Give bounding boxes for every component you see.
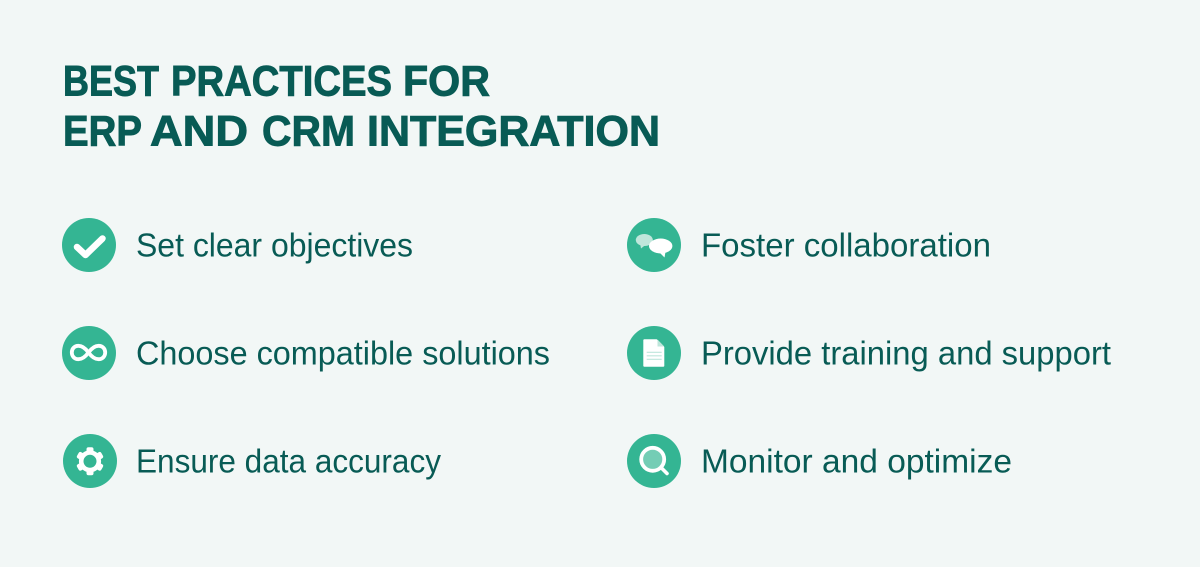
- item: provide training and support: [627, 326, 1111, 380]
- icon: gear: [63, 434, 117, 488]
- icon: check mark: [62, 218, 116, 272]
- item: choose compatible solutions: [62, 326, 550, 380]
- title: [63, 59, 660, 156]
- item: foster collaboration: [627, 218, 991, 272]
- label: choose compatible solutions: Choose compatible solutions: [136, 334, 550, 372]
- title: PRACTICES: [171, 59, 392, 106]
- label: monitor and optimize: Monitor and optimize: [701, 442, 1012, 480]
- label: ensure data accuracy: Ensure data accuracy: [136, 442, 441, 480]
- title: FOR: [403, 59, 490, 106]
- icon: infinity: [62, 326, 116, 380]
- label: foster collaboration: Foster collaboration: [701, 226, 991, 264]
- label: provide training and support: Provide training and support: [701, 334, 1111, 372]
- title: BEST: [63, 59, 159, 106]
- title: AND: [150, 109, 248, 156]
- title: ERP: [63, 109, 142, 156]
- icon: chat bubbles: [627, 218, 681, 272]
- label: set clear objectives: Set clear objectives: [136, 226, 413, 264]
- item: set clear objectives: [62, 218, 413, 272]
- icon: magnifying glass: [627, 434, 681, 488]
- title: CRM: [262, 109, 355, 156]
- item: ensure data accuracy: [63, 434, 441, 488]
- item: monitor and optimize: [627, 434, 1012, 488]
- title: INTEGRATION: [367, 109, 660, 156]
- icon: document: [627, 326, 681, 380]
